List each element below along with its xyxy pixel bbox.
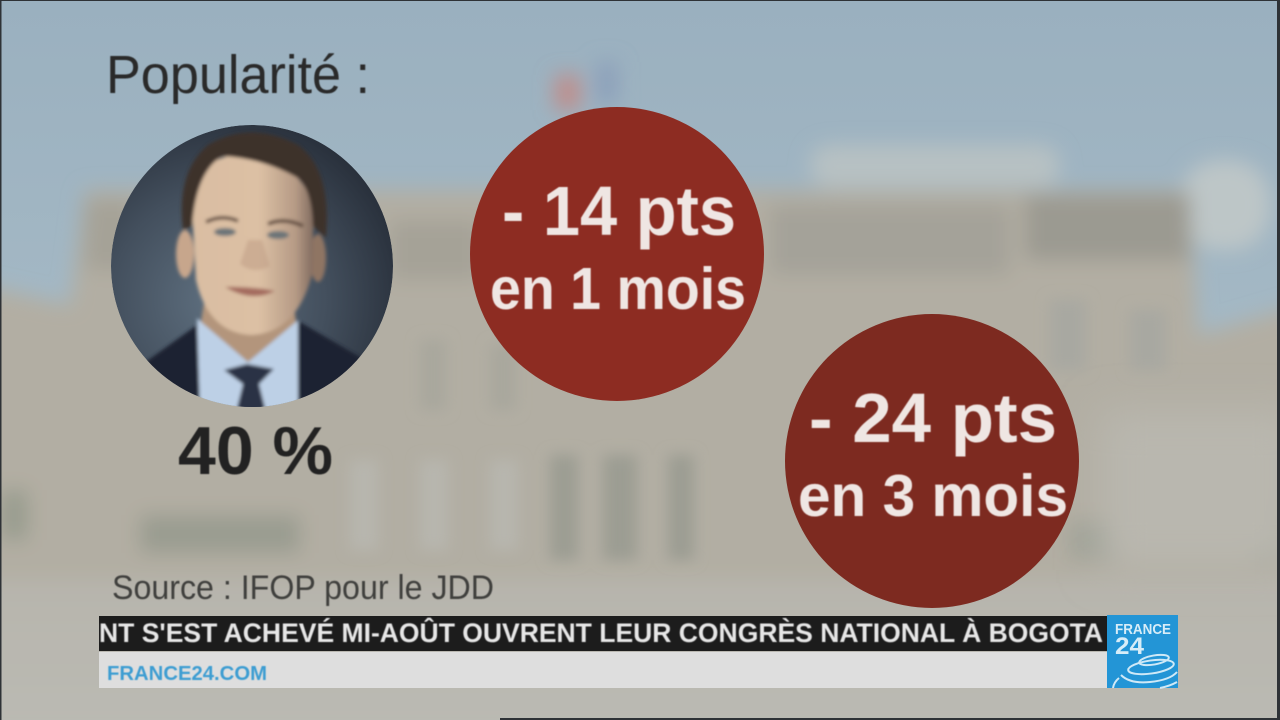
tie [224, 364, 274, 412]
hair [182, 132, 327, 238]
website bar [99, 652, 1107, 688]
shirt [197, 318, 298, 412]
portrait photo [111, 125, 393, 420]
ears [176, 230, 194, 278]
nose [240, 240, 270, 270]
mouth [225, 287, 275, 296]
website bar: FRANCE24.COM [107, 663, 267, 685]
circle: -24 pts en 3 mois [785, 314, 1079, 608]
logo: France 24: 24 [1115, 633, 1145, 660]
value: 40 %: 40 % [178, 413, 333, 489]
soft light wing at right [1100, 410, 1280, 570]
source: Source : IFOP pour le JDD [112, 569, 494, 607]
neck [199, 303, 298, 364]
circle: -14 pts en 1 mois: - 14 pts [502, 172, 736, 250]
news ticker: NT S'EST ACHEVÉ MI-AOÛT OUVRENT LEUR CONGRÈS NATIONAL À BOGOTA [99, 617, 1103, 648]
heading: Popularité : [106, 45, 370, 105]
logo: France 24 [1107, 615, 1178, 688]
circle: -24 pts en 3 mois: en 3 mois [798, 463, 1068, 529]
logo: France 24: FRANCE [1115, 622, 1171, 638]
circle: -24 pts en 3 mois: - 24 pts [809, 379, 1057, 457]
face [192, 155, 314, 335]
circle: -14 pts en 1 mois: en 1 mois [490, 256, 746, 322]
jacket [146, 321, 361, 400]
circle: -14 pts en 1 mois [470, 107, 764, 401]
eyes and brows [206, 218, 303, 226]
